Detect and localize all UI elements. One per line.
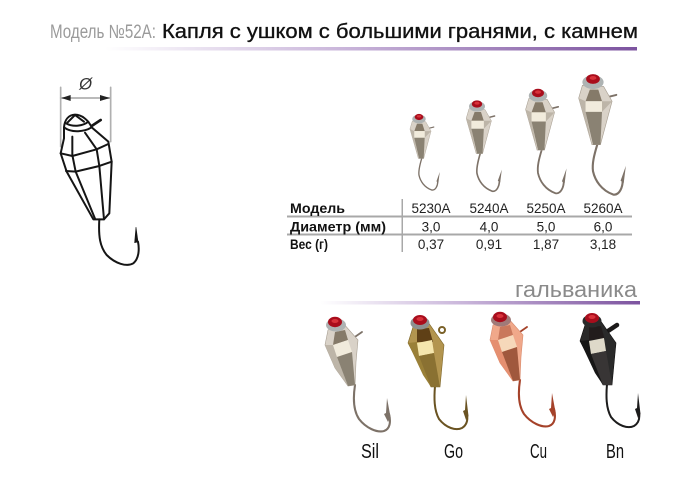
lure 5230A	[410, 114, 440, 190]
row: diameter	[290, 220, 612, 234]
specification table	[287, 199, 632, 252]
row: diameter: 4,0	[480, 220, 498, 234]
row: diameter: 3,0	[422, 220, 440, 234]
row: model: 5250A	[526, 201, 566, 216]
heading: galvanic finishes: гальваника	[515, 277, 638, 302]
technical drawing with diameter	[61, 74, 139, 265]
finish: gold	[408, 315, 468, 463]
finish: copper	[490, 312, 556, 463]
lure 5260A	[579, 74, 626, 195]
diameter dimension: Ø	[78, 74, 93, 93]
row: diameter: Диаметр (мм)	[290, 220, 386, 234]
row: model: Модель	[290, 201, 345, 216]
lures by size	[410, 74, 626, 195]
row: model: 5240A	[469, 201, 509, 216]
row: weight: Вес (г)	[290, 237, 328, 252]
row: weight: 3,18	[590, 237, 616, 252]
finish: silver	[325, 317, 390, 463]
row: diameter: 5,0	[537, 220, 555, 234]
row: weight	[290, 237, 616, 252]
finish: black nickel	[580, 313, 640, 463]
heading underline	[320, 301, 640, 304]
row: diameter: 6,0	[594, 220, 612, 234]
row: model: 5230A	[411, 201, 451, 216]
lure 5240A	[466, 100, 502, 191]
row: model: 5260A	[583, 201, 623, 216]
finish: copper: Cu	[530, 441, 547, 463]
row: weight: 0,91	[476, 237, 502, 252]
row: model	[290, 201, 623, 216]
row: weight: 0,37	[418, 237, 444, 252]
lure outline	[61, 115, 139, 265]
finish: gold: Go	[444, 441, 463, 463]
row: weight: 1,87	[533, 237, 559, 252]
diameter dimension	[61, 74, 111, 147]
title: Модель №52A:	[50, 22, 156, 43]
lure 5250A	[526, 89, 567, 193]
title: Капля с ушком с большими гранями, с камнем	[162, 20, 638, 43]
finish: silver: Sil	[361, 441, 379, 463]
title underline	[105, 47, 637, 50]
finish: black nickel: Bn	[606, 441, 624, 463]
